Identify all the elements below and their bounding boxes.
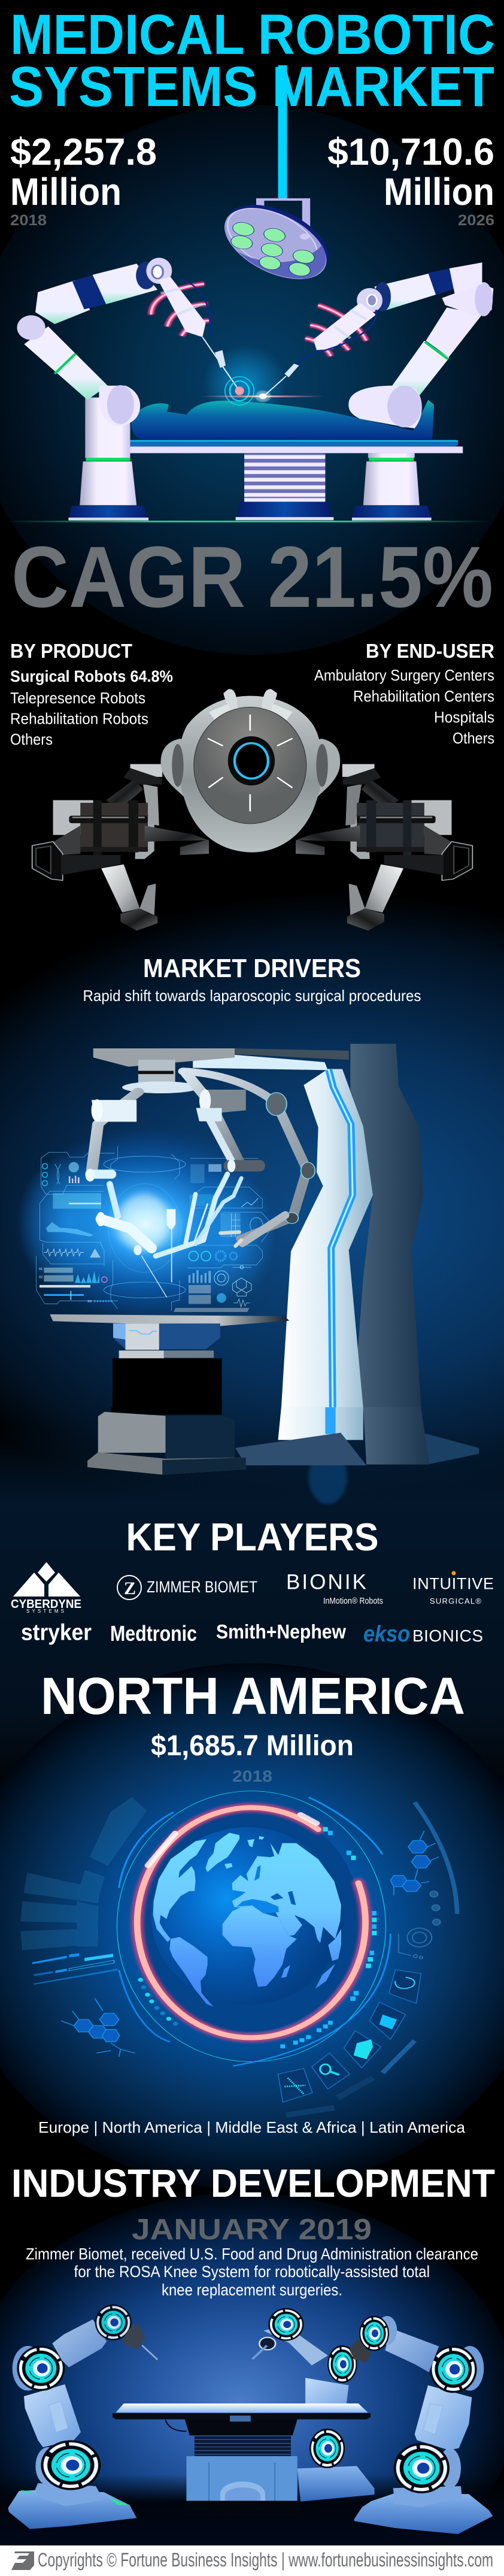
tower top arm — [93, 1048, 349, 1093]
hologram display — [14, 1126, 277, 1322]
HUD left charts: 01 — [39, 1268, 42, 1271]
thin rings — [117, 1791, 457, 2115]
illustration: right robot arm — [349, 2316, 493, 2534]
logo: Ekso Bionics — [363, 1622, 483, 1647]
panel: by product: BY PRODUCT — [10, 640, 132, 662]
body panel — [49, 2401, 68, 2432]
logo: Intuitive Surgical: INTUITIVE — [412, 1575, 494, 1593]
right glow — [180, 1170, 275, 1306]
date: JANUARY 2019 — [132, 2214, 372, 2246]
panel: by end-user: Others — [453, 729, 494, 747]
upper joint back — [456, 2346, 484, 2391]
logo: Zimmer Biomet: Z — [124, 1579, 136, 1598]
illustration: robot platform base — [87, 1407, 479, 1504]
top disc — [359, 2316, 389, 2351]
development description — [26, 2245, 478, 2299]
logo: Medtronic: Medtronic — [110, 1621, 197, 1646]
panel: by end-user — [314, 640, 494, 747]
background glow: globe — [0, 1663, 504, 2190]
target dots — [399, 1891, 441, 1958]
needle — [142, 2345, 157, 2360]
lower joint back — [439, 2448, 461, 2488]
left small bars — [32, 1953, 117, 1985]
syringes — [133, 1194, 208, 1297]
floor reflection — [309, 1450, 347, 1504]
right forearm — [220, 1215, 286, 1246]
left glow — [18, 1154, 122, 1290]
lower disc — [41, 2440, 101, 2490]
market drivers heading: MARKET DRIVERS — [143, 954, 361, 983]
tower front column — [281, 1069, 373, 1408]
base dome — [393, 2486, 462, 2507]
logo: Cyberdyne: CYBERDYNE — [11, 1598, 81, 1611]
footer band — [0, 2545, 504, 2576]
north america value — [151, 1730, 354, 1785]
right robot arm — [348, 262, 493, 521]
molecule left — [61, 1998, 135, 2057]
background glow: surgery scene — [0, 105, 504, 655]
upper disc — [17, 2346, 65, 2391]
top joint back — [377, 2316, 397, 2345]
north america heading: NORTH AMERICA — [41, 1667, 465, 1725]
icon tile: DNA — [278, 2069, 312, 2102]
robot hands inside hologram — [86, 1159, 286, 1297]
market size 2018: Million — [10, 170, 122, 213]
illustration: operating table — [113, 2403, 371, 2517]
panel: by product: Telepresence Robots — [10, 689, 145, 707]
body — [415, 2385, 472, 2450]
left robot arm — [17, 258, 172, 521]
development description: knee replacement surgeries. — [162, 2281, 342, 2299]
body panel — [423, 2403, 443, 2434]
upper disc — [430, 2346, 477, 2393]
lamp cord — [278, 65, 287, 199]
illustration: spider surgical robot head — [32, 689, 472, 931]
market drivers text: Rapid shift towards laparoscopic surgical procedures — [83, 987, 421, 1005]
body — [24, 2384, 81, 2447]
logo: Intuitive Surgical: SURGICAL® — [430, 1597, 481, 1606]
forearm — [385, 2329, 439, 2372]
logo: Bionik — [286, 1571, 383, 1606]
panel: by end-user: BY END-USER — [366, 640, 494, 662]
seas — [237, 1865, 296, 1913]
market size 2018: $2,257.8 — [10, 131, 157, 173]
table pedestal — [236, 453, 333, 520]
robot head shell — [160, 689, 340, 852]
icon: surgical lamp — [204, 193, 350, 291]
logo: Intuitive Surgical — [412, 1571, 494, 1606]
robot arms upper — [92, 1071, 307, 1239]
bellows end — [111, 1407, 222, 1415]
hologram glow — [14, 1126, 277, 1322]
globe — [151, 1827, 344, 2007]
inner disc — [136, 1806, 361, 2032]
base — [354, 2493, 493, 2534]
floor line — [7, 521, 488, 522]
regions list: Europe | North America | Middle East & Africa | Latin America — [38, 2118, 466, 2136]
continents — [153, 1833, 341, 2007]
panel: by product — [10, 640, 173, 748]
logo: Zimmer Biomet — [117, 1576, 257, 1600]
left hand — [86, 1169, 151, 1248]
development description: for the ROSA Knee System for robotically-assisted total — [74, 2263, 430, 2281]
logo: Cyberdyne — [11, 1562, 81, 1614]
key players heading: KEY PLAYERS — [126, 1515, 378, 1559]
illustration: left robot arm — [8, 2305, 157, 2529]
screen table — [50, 1314, 289, 1326]
logo: Ekso Bionics: BIONICS — [412, 1626, 483, 1645]
panel: by product: Others — [10, 730, 53, 748]
market size 2018: 2018 — [10, 212, 47, 229]
logo: Cyberdyne: SYSTEMS — [26, 1609, 64, 1614]
floor shade — [0, 2474, 504, 2545]
tool — [122, 2324, 145, 2350]
HUD right charts — [174, 1164, 263, 1312]
logo: Ekso Bionics: ekso — [363, 1622, 410, 1647]
molecule right — [390, 1831, 439, 1895]
tool — [349, 2338, 371, 2362]
base accents — [20, 2490, 130, 2505]
market size 2018 — [10, 131, 157, 229]
forearm — [52, 2320, 107, 2368]
globe decoration and icons — [21, 1791, 457, 2115]
HUD outlines — [37, 1146, 268, 1311]
panel: by product: Surgical Robots 64.8% — [10, 667, 173, 685]
background glow: robot platform — [0, 893, 504, 1540]
right arm assembly — [296, 764, 472, 931]
logo: Bionik: InMotion® Robots — [323, 1596, 383, 1606]
panel: by product: Rehabilitation Robots — [10, 709, 148, 727]
logo: Stryker: stryker — [21, 1620, 92, 1645]
market size 2026: 2026 — [458, 212, 494, 229]
icon tile: medical case — [370, 2002, 406, 2039]
left arm assembly — [32, 764, 209, 931]
column base — [235, 1407, 479, 1465]
tower light strip — [329, 1069, 353, 1408]
middle arm — [156, 1159, 259, 1256]
market size 2026: $10,710.6 — [327, 131, 494, 173]
lower disc — [394, 2443, 450, 2493]
icon tile: lungs — [344, 2031, 381, 2068]
panel: by end-user: Hospitals — [434, 708, 494, 726]
HUD left charts: X0 — [87, 1300, 92, 1304]
upper joint back — [13, 2346, 44, 2391]
base dome — [35, 2483, 104, 2506]
table top — [107, 440, 463, 453]
background glow: operating table — [0, 2193, 504, 2576]
illustration: surgical robot arms and patient — [7, 258, 493, 522]
panel: by end-user: Rehabilitation Centers — [353, 687, 494, 705]
arm joints — [92, 1089, 315, 1223]
market size 2026: Million — [384, 170, 494, 213]
ocean — [151, 1827, 344, 2005]
operating glow — [202, 346, 286, 421]
logo: Smith+Nephew: Smith+Nephew — [216, 1620, 346, 1643]
pedestal — [113, 1323, 222, 1409]
market size 2026 — [327, 131, 494, 229]
tower back panel — [350, 1044, 424, 1408]
left surgical tool — [151, 277, 239, 391]
patient — [132, 400, 434, 439]
hologram core — [119, 1193, 169, 1251]
lower joint back — [35, 2447, 60, 2485]
north america value: 2018 — [232, 1767, 272, 1785]
surgical sparks — [199, 377, 324, 405]
background band: key players — [0, 1426, 504, 1809]
icon tile: stethoscope — [389, 1970, 421, 2003]
icon: Fortune Business Insights logo — [11, 2551, 34, 2570]
left data blocks — [21, 1797, 146, 1950]
HUD left charts: 02 — [39, 1275, 42, 1279]
base — [8, 2490, 136, 2529]
pedestal block — [87, 1412, 246, 1475]
illustration: robot platform tower — [50, 1044, 424, 1409]
pink progress ring — [137, 1807, 366, 2037]
illustration: middle robot — [253, 2308, 375, 2502]
icon tile: magnifier — [312, 2053, 350, 2089]
logo: Zimmer Biomet: ZIMMER BIOMET — [147, 1578, 257, 1596]
logo: Bionik: BIONIK — [286, 1571, 366, 1594]
right surgical tool — [263, 303, 377, 397]
title — [9, 3, 495, 119]
ring tick marks — [138, 1827, 377, 2048]
top disc — [95, 2305, 132, 2341]
north america value: $1,685.7 Million — [151, 1730, 354, 1762]
HUD left charts — [39, 1162, 112, 1304]
